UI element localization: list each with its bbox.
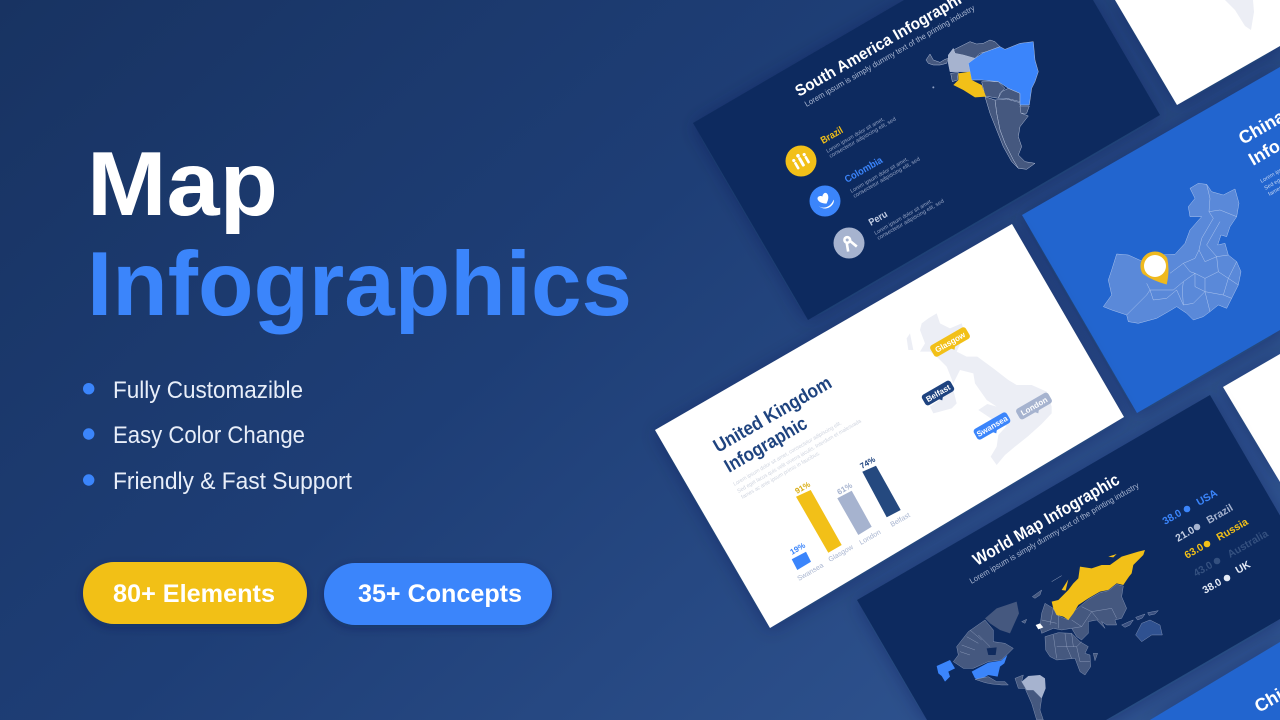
bar chart: Belfast (890, 512, 912, 529)
tag: London (1015, 392, 1054, 423)
item: Brazil (786, 116, 897, 176)
bar chart: London (858, 529, 882, 547)
panel: white slide right (1223, 354, 1280, 482)
bar chart: 91% (794, 480, 812, 496)
item: Peru: Peru (867, 209, 890, 229)
tag: Belfast (921, 380, 957, 409)
body text: fames ac ante ipsum primis in faucibus. (740, 450, 822, 501)
bar chart: 74% (858, 455, 877, 471)
item: Colombia: Colombia (843, 155, 885, 186)
item: Brazil: Brazil (819, 125, 845, 147)
feature list: Easy Color Change (113, 422, 305, 449)
subtitle: Lorem ipsum is simply dummy text of the printing industry (968, 481, 1141, 586)
panel: South America slide (693, 0, 1160, 320)
legend: Australia (1226, 528, 1271, 561)
legend: 63.0 (1182, 541, 1206, 562)
legend: 43.0 (1192, 559, 1215, 580)
panel: World map slide (857, 395, 1280, 720)
legend: Russia (1214, 516, 1250, 544)
icon: people (791, 150, 811, 170)
item: Brazil: consectetur adipiscing elit, sed (828, 117, 897, 160)
heading: United Kingdom: United Kingdom (710, 373, 836, 457)
button: 35+ Concepts: 35+ Concepts (358, 580, 522, 608)
panel: China slide bottom (1150, 642, 1280, 720)
heading: China (1235, 106, 1280, 169)
legend: Brazil (1204, 502, 1235, 527)
legend (1160, 487, 1271, 597)
bar chart: Glasgow (828, 544, 855, 564)
tag: Glasgow (929, 326, 972, 360)
map: South America (926, 40, 1038, 169)
legend: 38.0 (1200, 576, 1224, 597)
tag: Glasgow: Glasgow (934, 330, 968, 355)
legend: 21.0 (1174, 524, 1197, 545)
subtitle: Lorem ipsum is simply dummy text of the printing industry (803, 3, 976, 109)
icon: heart in hands (815, 191, 836, 212)
map fragment (1225, 0, 1254, 30)
title: Infographics (87, 234, 632, 335)
icon: map pin (1140, 251, 1168, 284)
legend: 38.0 (1160, 507, 1184, 528)
map: China (1103, 183, 1241, 323)
bar chart: 19% (788, 541, 807, 557)
feature list: Fully Customazible (113, 377, 303, 404)
feature list (83, 377, 352, 495)
panel: China slide (1022, 67, 1280, 413)
bar chart: Swansea (796, 562, 825, 583)
tag: Swansea (973, 411, 1013, 443)
item: Peru: consectetur adipiscing elit, sed (876, 199, 945, 242)
title: Map (87, 134, 278, 235)
bar chart (788, 455, 912, 583)
feature list: Friendly & Fast Support (113, 468, 352, 495)
panel: white slide top right (1115, 0, 1280, 105)
body text: Lorem ipsum dolor sit amet, consectetur adipiscing elit. (732, 420, 843, 488)
tag: Swansea: Swansea (975, 414, 1010, 439)
item: Peru (834, 198, 945, 258)
tag: London: London (1019, 395, 1049, 418)
map: World (937, 550, 1162, 720)
item: Peru: Lorem ipsum dolor sit amet, (874, 198, 934, 237)
item: Colombia: Lorem ipsum dolor sit amet, (850, 156, 910, 195)
body text: Sed eget lacus quis velit viverra iaculis. Interdum et malesuada (736, 418, 863, 495)
legend: UK (1234, 558, 1253, 577)
item: Brazil: Lorem ipsum dolor sit amet, (826, 116, 886, 155)
title (87, 134, 632, 335)
bar chart: 61% (836, 481, 854, 497)
legend: USA (1194, 487, 1220, 509)
heading: United Kingdom: Infographic (721, 413, 811, 477)
icon: ribbon (842, 235, 857, 252)
button: 80+ Elements: 80+ Elements (113, 580, 275, 608)
body text (1260, 167, 1280, 198)
tag: Belfast: Belfast (924, 383, 952, 404)
item: Colombia (810, 155, 921, 216)
button: 80+ Elements (83, 562, 307, 624)
button: 35+ Concepts (324, 563, 552, 625)
panel: United Kingdom slide (655, 224, 1124, 628)
item: Colombia: consectetur adipiscing elit, sed (852, 157, 921, 200)
heading: World Map: World Map Infographic (970, 470, 1123, 569)
map: United Kingdom (907, 313, 1052, 465)
